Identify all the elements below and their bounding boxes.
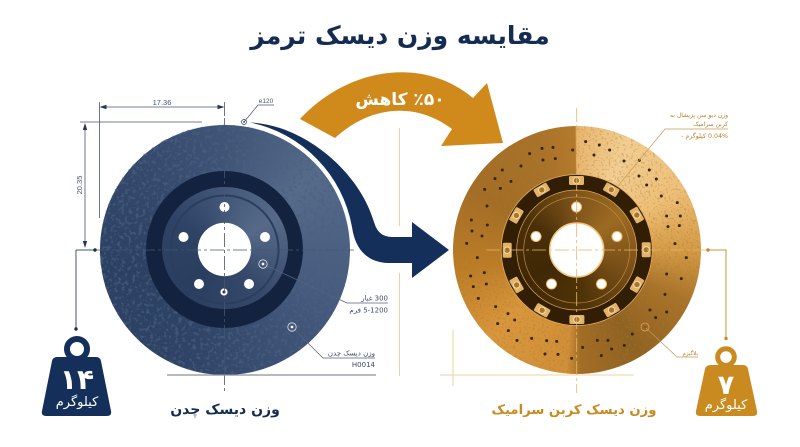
weight icon: 14 kg: کیلوگرم — [56, 394, 99, 410]
center lines — [486, 108, 728, 393]
dimension: width: 17.36 — [153, 98, 171, 107]
panel: cast iron disc — [42, 98, 388, 418]
weight icon: 14 kg — [42, 339, 111, 416]
callout: 300 / 5-1200: 300 غبار — [360, 294, 388, 302]
drilled holes upper half — [465, 140, 688, 259]
callout: e120: e120 — [259, 98, 274, 105]
callout: carbon ceramic spec — [617, 112, 728, 187]
callout: cast iron disc weight: H0014 — [352, 361, 376, 369]
weight icon: 7 kg — [696, 349, 757, 416]
callout: carbon ceramic spec: 0.04% کیلوگرم - — [681, 132, 728, 140]
label: cast iron disc weight: وزن دیسک چدن — [170, 402, 280, 418]
callout: balance weight — [641, 323, 698, 357]
callout: carbon ceramic spec: کربن سرامیک — [693, 121, 728, 128]
technical dimension lines — [74, 102, 376, 393]
wheel bolt holes — [178, 202, 270, 296]
mounting tabs — [503, 176, 651, 324]
callout: cast iron disc weight: وزن دیسک چدن — [328, 350, 375, 358]
weight icon: 7 kg: کیلوگرم — [705, 397, 748, 413]
callout: 300 / 5-1200: 5-1200 فرم — [349, 306, 388, 314]
callout: carbon ceramic spec: وزن دیو سن پزیشال به — [670, 112, 728, 119]
light guide lines — [400, 128, 634, 386]
arrow label: 50 percent reduction: ۵۰‏٪ کاهش — [355, 90, 445, 110]
callout: e120 — [242, 98, 274, 124]
arrow: gold reduction arrow — [300, 72, 503, 146]
weight icon: 14 kg: ۱۴ — [60, 363, 94, 396]
wheel bolt holes — [531, 202, 622, 289]
panel: carbon ceramic disc — [400, 108, 757, 418]
title: مقایسه وزن دیسک ترمز — [248, 21, 550, 51]
weight icon: 7 kg: ۷ — [718, 370, 735, 401]
arrow: blue, from cast iron to carbon ceramic disc — [250, 122, 449, 278]
disc: cast iron rotor surface — [100, 124, 350, 374]
label: carbon ceramic disc weight: وزن دیسک کربن سرامیک — [492, 403, 656, 418]
callout: cast iron disc weight — [288, 323, 376, 369]
callout: balance weight: بلاگیزم — [682, 350, 698, 357]
drilled holes lower half — [469, 271, 683, 360]
callout: 300 / 5-1200 — [259, 260, 388, 314]
dimension: height: 20.35 — [75, 176, 84, 194]
disc: carbon ceramic rotor surface — [453, 126, 701, 374]
